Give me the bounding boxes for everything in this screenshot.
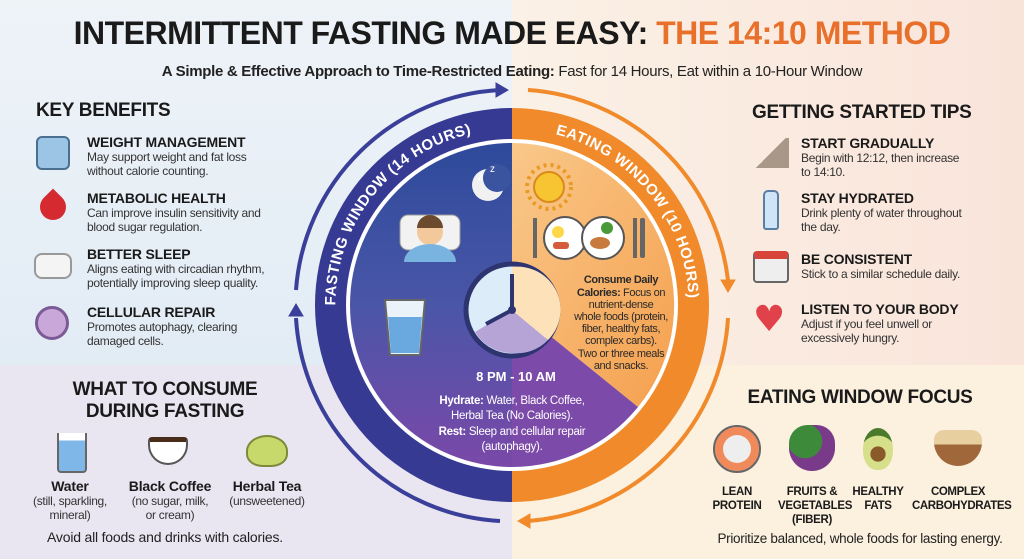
icon: sleeping person (400, 215, 460, 262)
tip: hydrated (801, 190, 962, 234)
item: tea: Herbal Tea (233, 478, 301, 494)
item: tea (229, 478, 305, 508)
tip: listen: LISTEN TO YOUR BODY (801, 301, 958, 317)
text: consume daily calories: whole foods (protein, (573, 311, 668, 323)
icon: vegetables (789, 425, 835, 471)
tip: hydrated: Drink plenty of water throughout (801, 206, 962, 220)
ring labels (335, 129, 512, 320)
disk: eating (512, 143, 674, 407)
heading: WHAT TO CONSUME (73, 379, 257, 400)
label: complex carbs (912, 486, 1012, 512)
label: fruits & vegetables: VEGETABLES (778, 500, 852, 512)
heading: EATING WINDOW FOCUS (747, 387, 973, 408)
panel: what to consume during fasting (33, 379, 305, 545)
label: fruits & vegetables (778, 486, 852, 526)
benefit: sleep (87, 246, 264, 290)
benefit: metabolic: METABOLIC HEALTH (87, 190, 226, 206)
benefit: metabolic (87, 190, 261, 234)
item: coffee (129, 478, 211, 522)
text: time range: 8 PM - 10 AM (476, 369, 556, 384)
text: hydrate/rest: Herbal Tea (No Calories). (451, 410, 573, 422)
heading: DURING FASTING (86, 401, 244, 422)
item: coffee: Black Coffee (129, 478, 211, 494)
center chart: FASTING WINDOW (14 HOURS) (324, 124, 470, 304)
text: consume daily calories: complex carbs). (585, 335, 657, 347)
panel: getting started tips (752, 102, 972, 345)
clock (466, 264, 561, 356)
tip: hydrated: STAY HYDRATED (801, 190, 914, 206)
benefit: metabolic: blood sugar regulation. (87, 220, 202, 234)
label: healthy fats (852, 486, 904, 512)
tip: start gradually (801, 135, 959, 179)
tip: consistent: BE CONSISTENT (801, 251, 912, 267)
icon: plates (533, 217, 645, 259)
benefit: cellular: CELLULAR REPAIR (87, 304, 215, 320)
tip: listen (801, 301, 958, 345)
benefit: weight (87, 134, 246, 178)
panel: eating window focus (712, 387, 1012, 546)
text: consume daily calories: Calories: Focus on (577, 287, 665, 299)
text: hydrate/rest: (autophagy). (482, 441, 543, 453)
disk: purple wedge (512, 305, 638, 467)
icon: moon: z (490, 164, 495, 175)
benefit: sleep: Aligns eating with circadian rhythm, (87, 262, 264, 276)
benefit: cellular: damaged cells. (87, 334, 164, 348)
item: tea: (unsweetened) (229, 494, 305, 508)
heading: key benefits: KEY BENEFITS (36, 100, 170, 121)
label: fruits & vegetables: (FIBER) (792, 514, 832, 526)
label: lean protein: PROTEIN (712, 500, 762, 512)
item: water (33, 478, 107, 522)
label: lean protein: LEAN (722, 486, 752, 498)
icon: moon (472, 164, 511, 201)
icon: scale (36, 136, 70, 170)
label: healthy fats: HEALTHY (852, 486, 904, 498)
note: Avoid all foods and drinks with calories. (47, 529, 283, 545)
icon: stairs (753, 138, 789, 168)
icon: avocado (863, 428, 893, 470)
label: complex carbs: CARBOHYDRATES (912, 500, 1011, 512)
icon: pillow (34, 253, 72, 279)
benefit: cellular (87, 304, 237, 348)
item: coffee: (no sugar, milk, (132, 494, 208, 508)
label: lean protein (712, 486, 762, 512)
icon: glass of water (385, 300, 425, 355)
icon: bottle (763, 190, 779, 230)
icon: teapot (246, 435, 288, 467)
icon: coffee cup (148, 437, 188, 465)
text: consume daily calories: nutrient-dense (589, 299, 654, 311)
label: healthy fats: FATS (864, 500, 892, 512)
tip: consistent (801, 251, 960, 281)
text: consume daily calories (573, 274, 668, 372)
benefit: weight: WEIGHT MANAGEMENT (87, 134, 245, 150)
center chart: EATING WINDOW (10 HOURS) (556, 124, 700, 298)
background (0, 0, 512, 365)
text: consume daily calories: Two or three meals (578, 348, 665, 360)
benefit: weight: without calorie counting. (87, 164, 208, 178)
subtitle: A Simple & Effective Approach to Time-Restricted Eating: Fast for 14 Hours, Eat within a 10-Hour Window (162, 63, 862, 80)
tip: listen: Adjust if you feel unwell or (801, 317, 932, 331)
ring: eating (512, 108, 709, 502)
tip: hydrated: the day. (801, 220, 840, 234)
title: INTERMITTENT FASTING MADE EASY: THE 14:10 METHOD (74, 15, 950, 51)
text: consume daily calories: fiber, healthy fats, (582, 323, 660, 335)
item: water: Water (51, 478, 89, 494)
benefit: sleep: potentially improving sleep quality. (87, 276, 258, 290)
icon: calendar (753, 251, 789, 283)
item: coffee: or cream) (146, 508, 194, 522)
icon: cell (35, 306, 69, 340)
item: water: mineral) (50, 508, 90, 522)
label: fruits & vegetables: FRUITS & (787, 486, 837, 498)
icon: water glass (57, 433, 87, 473)
icon: moon: z (478, 172, 483, 183)
tip: start gradually: Begin with 12:12, then increase (801, 151, 959, 165)
heading (72, 379, 257, 422)
benefit: sleep: BETTER SLEEP (87, 246, 190, 262)
benefit: metabolic: Can improve insulin sensitivity and (87, 206, 261, 220)
text: hydrate/rest (439, 395, 586, 453)
icon: protein plate (713, 425, 761, 473)
item: water: (still, sparkling, (33, 494, 107, 508)
label: complex carbs: COMPLEX (931, 486, 985, 498)
tip: start gradually: START GRADUALLY (801, 135, 934, 151)
disk: fasting (350, 143, 512, 467)
ring: fasting (315, 108, 512, 502)
text: hydrate/rest: Rest: Sleep and cellular repair (439, 426, 586, 438)
outer arrows (289, 83, 735, 528)
tip: consistent: Stick to a similar schedule daily. (801, 267, 960, 281)
icon: sun (527, 165, 571, 209)
panel: key benefits (34, 100, 264, 348)
benefit: weight: May support weight and fat loss (87, 150, 246, 164)
tip: listen: excessively hungry. (801, 331, 899, 345)
text: hydrate/rest: Hydrate: Water, Black Coffee, (439, 395, 585, 407)
benefit: cellular: Promotes autophagy, clearing (87, 320, 237, 334)
text: consume daily calories: and snacks. (594, 360, 648, 372)
icon: heart: ♥ (753, 299, 785, 340)
icon: grains bowl (934, 430, 982, 466)
note: Prioritize balanced, whole foods for lasting energy. (717, 531, 1003, 546)
heading: GETTING STARTED TIPS (752, 102, 972, 123)
text: consume daily calories: Consume Daily (584, 274, 659, 286)
icon: blood drop (35, 189, 71, 225)
tip: start gradually: to 14:10. (801, 165, 845, 179)
